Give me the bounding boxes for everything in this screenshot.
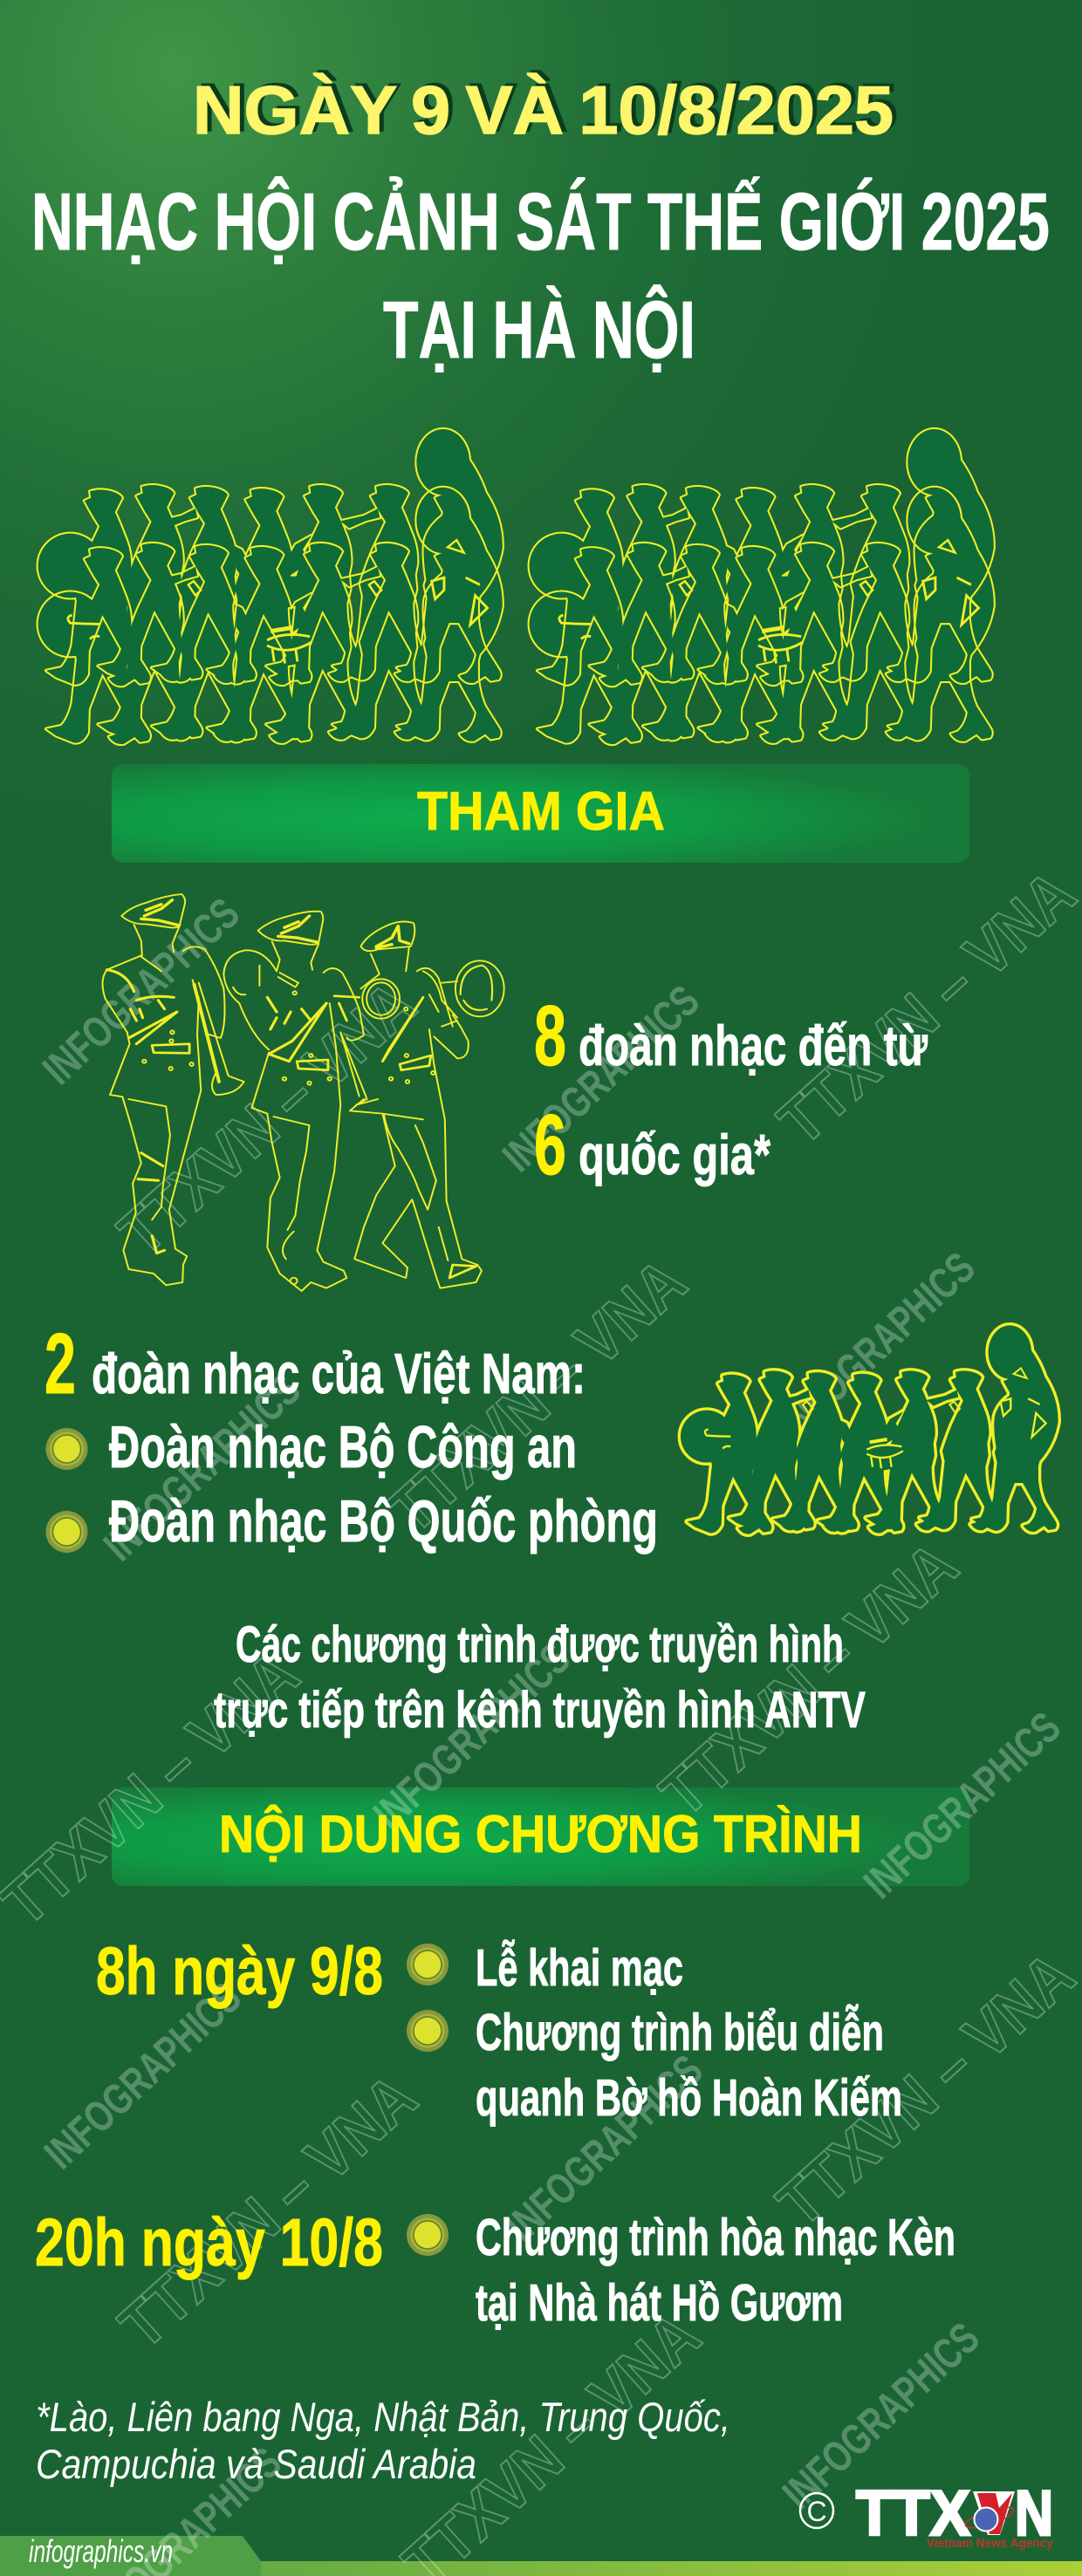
heading: tham gia: THAM GIA [417, 782, 665, 842]
title line 3: TẠI HÀ NỘI [383, 284, 695, 375]
marching band illustration: first group [17, 408, 536, 760]
day 1 item a: Lễ khai mạc [476, 1939, 683, 1997]
broadcast note [214, 1616, 866, 1739]
broadcast line 1: Các chương trình được truyền hình [236, 1616, 844, 1673]
logo globe [963, 2503, 1016, 2532]
footnote: countries: *Lào, Liên bang Nga, Nhật Bản, Trung Quốc, [36, 2394, 730, 2440]
copyright mark [800, 2493, 833, 2528]
logo: copyright ttxvn [800, 2478, 1054, 2551]
watermarks: INFOGRAPHICS [773, 2313, 989, 2518]
watermarks [0, 857, 1082, 2576]
day 2 item line 2: tại Nhà hát Hồ Gươm [476, 2274, 843, 2332]
logo wordmark [856, 2478, 1053, 2549]
watermarks: TTXVN – VNA [106, 2060, 430, 2362]
watermarks: TTXVN – VNA [647, 1528, 971, 1830]
watermarks: INFOGRAPHICS [35, 1973, 250, 2178]
stat text countries: quốc gia* [579, 1123, 771, 1186]
band name 1: Đoàn nhạc Bộ Công an [109, 1414, 577, 1480]
bullet 2 [45, 1511, 87, 1553]
vietnam bands block [45, 1315, 658, 1554]
background top glow [0, 0, 1082, 960]
schedule: day 2 [35, 2205, 955, 2332]
bullet 1 [45, 1428, 87, 1470]
watermarks: INFOGRAPHICS [364, 1634, 579, 1839]
illustration: three trumpeters [103, 894, 504, 1291]
watermarks: INFOGRAPHICS [769, 1243, 984, 1448]
marching band illustration: small [677, 1322, 1061, 1537]
trumpeter 3 [350, 921, 504, 1288]
day 1 item b line 2: quanh Bờ hồ Hoàn Kiếm [476, 2069, 902, 2127]
day 2 time: 20h ngày 10/8 [35, 2205, 383, 2280]
logo tagline: Vietnam News Agency [927, 2536, 1054, 2551]
title block [31, 69, 1050, 375]
watermarks: INFOGRAPHICS [496, 2046, 712, 2251]
title date: NGÀY 9 VÀ 10/8/2025 [193, 72, 894, 148]
copyright mark: C [806, 2496, 827, 2527]
vietnam bands heading: đoàn nhạc của Việt Nam: [92, 1342, 586, 1405]
watermarks: INFOGRAPHICS [33, 889, 249, 1094]
banner: noi dung chuong trinh background [112, 1787, 969, 1886]
watermarks: INFOGRAPHICS [493, 976, 709, 1181]
stat number 8: 8 [534, 987, 566, 1083]
footnote: countries: Campuchia và Saudi Arabia [36, 2441, 476, 2487]
banner: tham gia background [112, 764, 969, 863]
trumpeter 1 [103, 894, 244, 1285]
watermarks: TTXVN – VNA [375, 1245, 700, 1547]
marching band illustration: second group [527, 427, 996, 747]
source url: infographics.vn [29, 2533, 173, 2569]
day 1 bullet b [407, 2010, 449, 2052]
schedule: day 1 [96, 1934, 902, 2127]
day 1 bullet a [407, 1944, 449, 1985]
broadcast line 2: trực tiếp trên kênh truyền hình ANTV [214, 1682, 866, 1739]
title date shadow: NGÀY 9 VÀ 10/8/2025 [197, 69, 898, 146]
stat number 2: 2 [45, 1315, 76, 1411]
bottom left tab [0, 2536, 261, 2576]
heading: noi dung chuong trinh: NỘI DUNG CHƯƠNG TRÌNH [219, 1805, 862, 1863]
stat block: bands and countries [534, 987, 928, 1192]
logo wordmark: N [1015, 2478, 1053, 2549]
watermarks: INFOGRAPHICS [94, 1365, 310, 1570]
day 1 time: 8h ngày 9/8 [96, 1934, 383, 2009]
band name 2: Đoàn nhạc Bộ Quốc phòng [109, 1488, 658, 1554]
trumpeter 2 [223, 912, 378, 1291]
logo wordmark: TTX [856, 2478, 970, 2549]
watermarks: TTXVN – VNA [105, 967, 429, 1269]
stat number 6: 6 [534, 1097, 566, 1192]
bottom gradient bar [0, 2561, 1082, 2576]
day 1 item b line 1: Chương trình biểu diễn [476, 2004, 884, 2061]
footnote: countries [36, 2394, 730, 2487]
day 2 bullet [407, 2214, 449, 2256]
stat text bands: đoàn nhạc đến từ [579, 1014, 928, 1077]
